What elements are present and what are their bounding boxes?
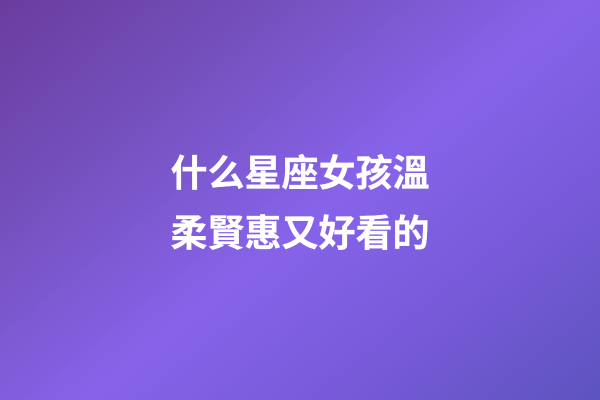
title: 柔賢惠又好看的: [170, 213, 430, 254]
title: 什么星座女孩溫: [170, 153, 430, 194]
title: [170, 153, 430, 254]
